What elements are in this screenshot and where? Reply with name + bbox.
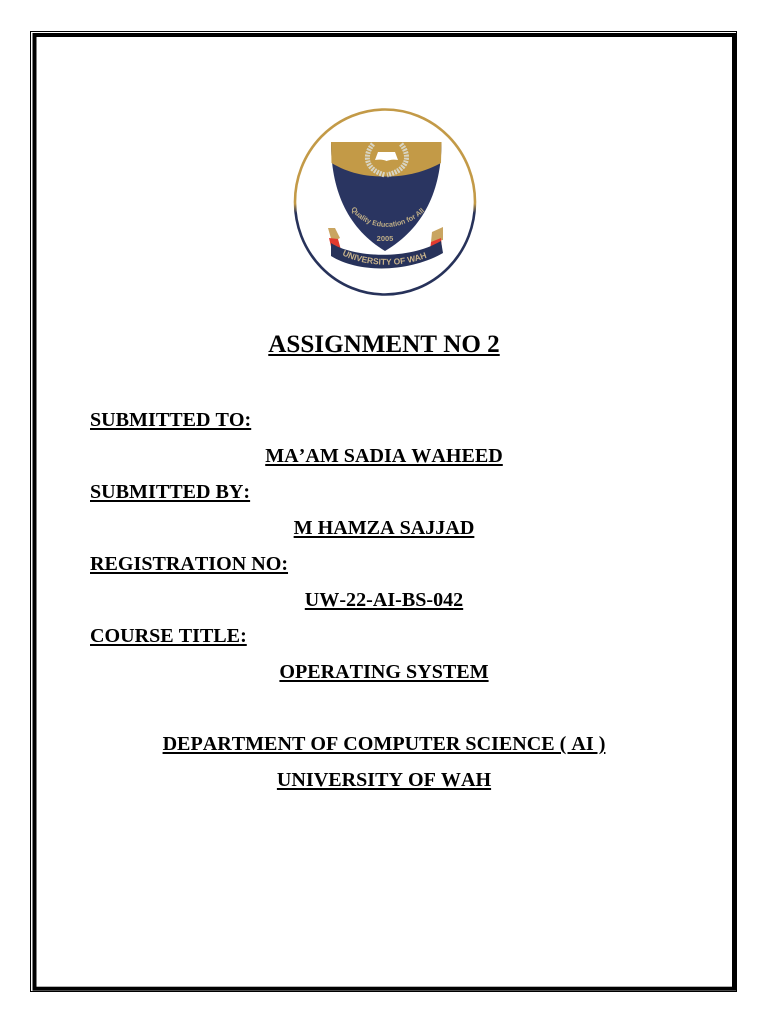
- motto: Quality Education for All: [352, 207, 424, 227]
- teacher name: MA’AM SADIA WAHEED: [265, 445, 503, 467]
- motto: 2005: [377, 234, 393, 243]
- university name: UNIVERSITY OF WAH: [277, 769, 491, 791]
- submitted to label: SUBMITTED TO:: [90, 409, 251, 431]
- registration number: UW-22-AI-BS-042: [305, 589, 463, 611]
- university logo: [294, 108, 476, 296]
- department: DEPARTMENT OF COMPUTER SCIENCE ( AI ): [163, 733, 605, 755]
- emblem: book and wreath: [367, 144, 407, 175]
- submitted by label: SUBMITTED BY:: [90, 481, 250, 503]
- student name: M HAMZA SAJJAD: [294, 517, 474, 539]
- course title label: COURSE TITLE:: [90, 625, 247, 647]
- shield: [331, 142, 442, 251]
- title: ASSIGNMENT NO 2: [268, 331, 500, 358]
- ribbon banner: UNIVERSITY OF WAH: [343, 250, 426, 265]
- registration label: REGISTRATION NO:: [90, 553, 288, 575]
- motto: [352, 207, 424, 243]
- course name: OPERATING SYSTEM: [279, 661, 489, 683]
- logo ring: [295, 110, 475, 294]
- ribbon banner: [328, 227, 443, 268]
